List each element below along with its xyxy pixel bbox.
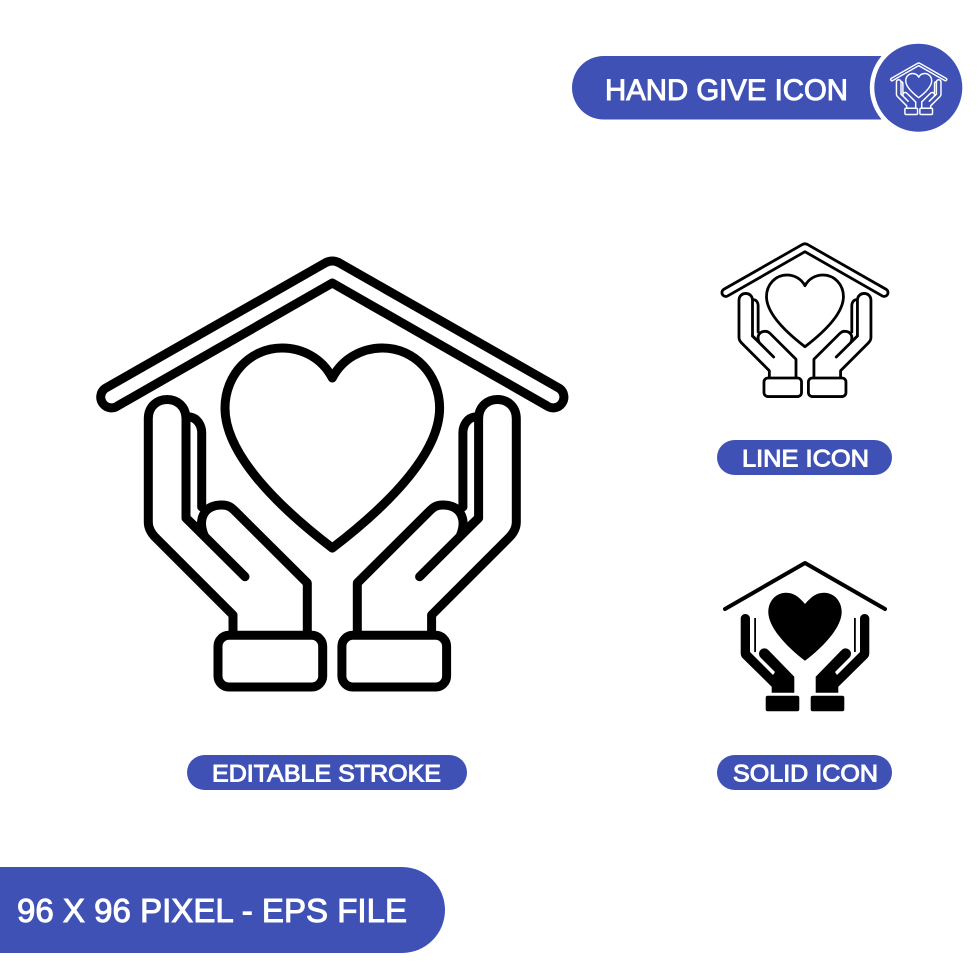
icon: solid house with hands and heart (725, 563, 885, 711)
banner: file details (0, 867, 445, 953)
solid left hand (741, 614, 799, 711)
icon: large editable stroke house with hands and heart (101, 261, 564, 687)
badge ring gap (870, 39, 967, 136)
banner: file details: 96 X 96 PIXEL - EPS FILE (17, 892, 407, 929)
badge circle (874, 44, 962, 132)
badge: hand give icon (572, 39, 967, 136)
label: line icon (717, 440, 892, 475)
label: editable stroke: EDITABLE STROKE (212, 760, 441, 788)
label: solid icon (717, 755, 892, 790)
solid right hand (811, 614, 869, 711)
label: solid icon: SOLID ICON (733, 760, 878, 788)
solid roof (725, 563, 885, 609)
icon: badge hands, heart and house (891, 63, 947, 115)
icon: small line house with hands and heart (722, 244, 888, 397)
badge pill (572, 56, 912, 120)
label: line icon: LINE ICON (742, 446, 869, 472)
solid heart (768, 593, 842, 661)
badge heading: HAND GIVE ICON (605, 74, 848, 107)
label: editable stroke (187, 755, 467, 790)
